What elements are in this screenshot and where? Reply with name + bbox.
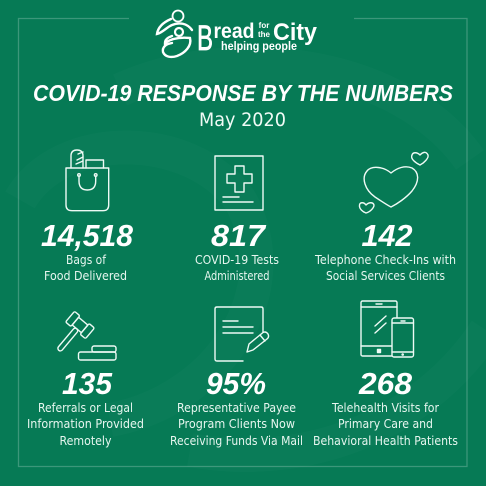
panel: covid tests: [195, 156, 279, 283]
subtitle: May 2020: [199, 109, 286, 131]
stat: 135: 135: [62, 366, 113, 401]
stat: 142: 142: [362, 218, 412, 253]
icon: medical document: [215, 156, 263, 210]
panel: telehealth: [313, 301, 458, 448]
icon: tablet and phone: [361, 301, 414, 357]
label: COVID-19 Tests: [195, 253, 279, 267]
logo: Bread for the City: [157, 10, 318, 58]
panel: bags of food: Food Delivered: [44, 269, 127, 283]
logo: Bread for the City: City: [273, 19, 318, 46]
panel: representative payee: [170, 307, 303, 448]
logo: Bread for the City: for: [259, 21, 269, 30]
panel: telehealth: Behavioral Health Patients: [313, 434, 458, 448]
label: Bags of: [66, 253, 107, 267]
panel: covid tests: Administered: [204, 269, 270, 283]
panel: representative payee: Program Clients Now: [178, 417, 295, 431]
panel: telehealth: Primary Care and: [338, 417, 433, 431]
icon: logo figures: [157, 10, 192, 57]
panel: telephone check-ins: [314, 152, 456, 283]
logo: Bread for the City: read: [214, 20, 254, 43]
icon: grocery bag: [66, 150, 109, 211]
panel: representative payee: Receiving Funds Via Mail: [170, 434, 303, 448]
panel: legal referrals: Information Provided: [27, 417, 144, 431]
panel: bags of food: [41, 150, 134, 283]
icon: gavel: [49, 311, 116, 360]
panel: legal referrals: Remotely: [60, 434, 112, 448]
logo wordmark: B: [197, 19, 213, 58]
icon: hearts: [359, 152, 428, 213]
stat: 817: 817: [211, 218, 267, 253]
label: Referrals or Legal: [38, 401, 133, 415]
title: COVID-19 RESPONSE BY THE NUMBERS: [33, 80, 453, 106]
logo: Bread for the City: helping people: [221, 41, 297, 53]
logo: Bread for the City: the: [258, 30, 271, 39]
stat: 95%: 95%: [206, 366, 266, 401]
label: Telehealth Visits for: [331, 401, 440, 415]
label: Representative Payee: [177, 401, 296, 415]
panel: legal referrals: [27, 311, 144, 448]
panel: telephone check-ins: Social Services Clients: [326, 269, 445, 283]
stat: 14,518: 14,518: [41, 218, 134, 253]
label: Telephone Check-Ins with: [314, 253, 456, 267]
stat: 268: 268: [358, 366, 413, 401]
icon: document and pen: [215, 307, 269, 361]
